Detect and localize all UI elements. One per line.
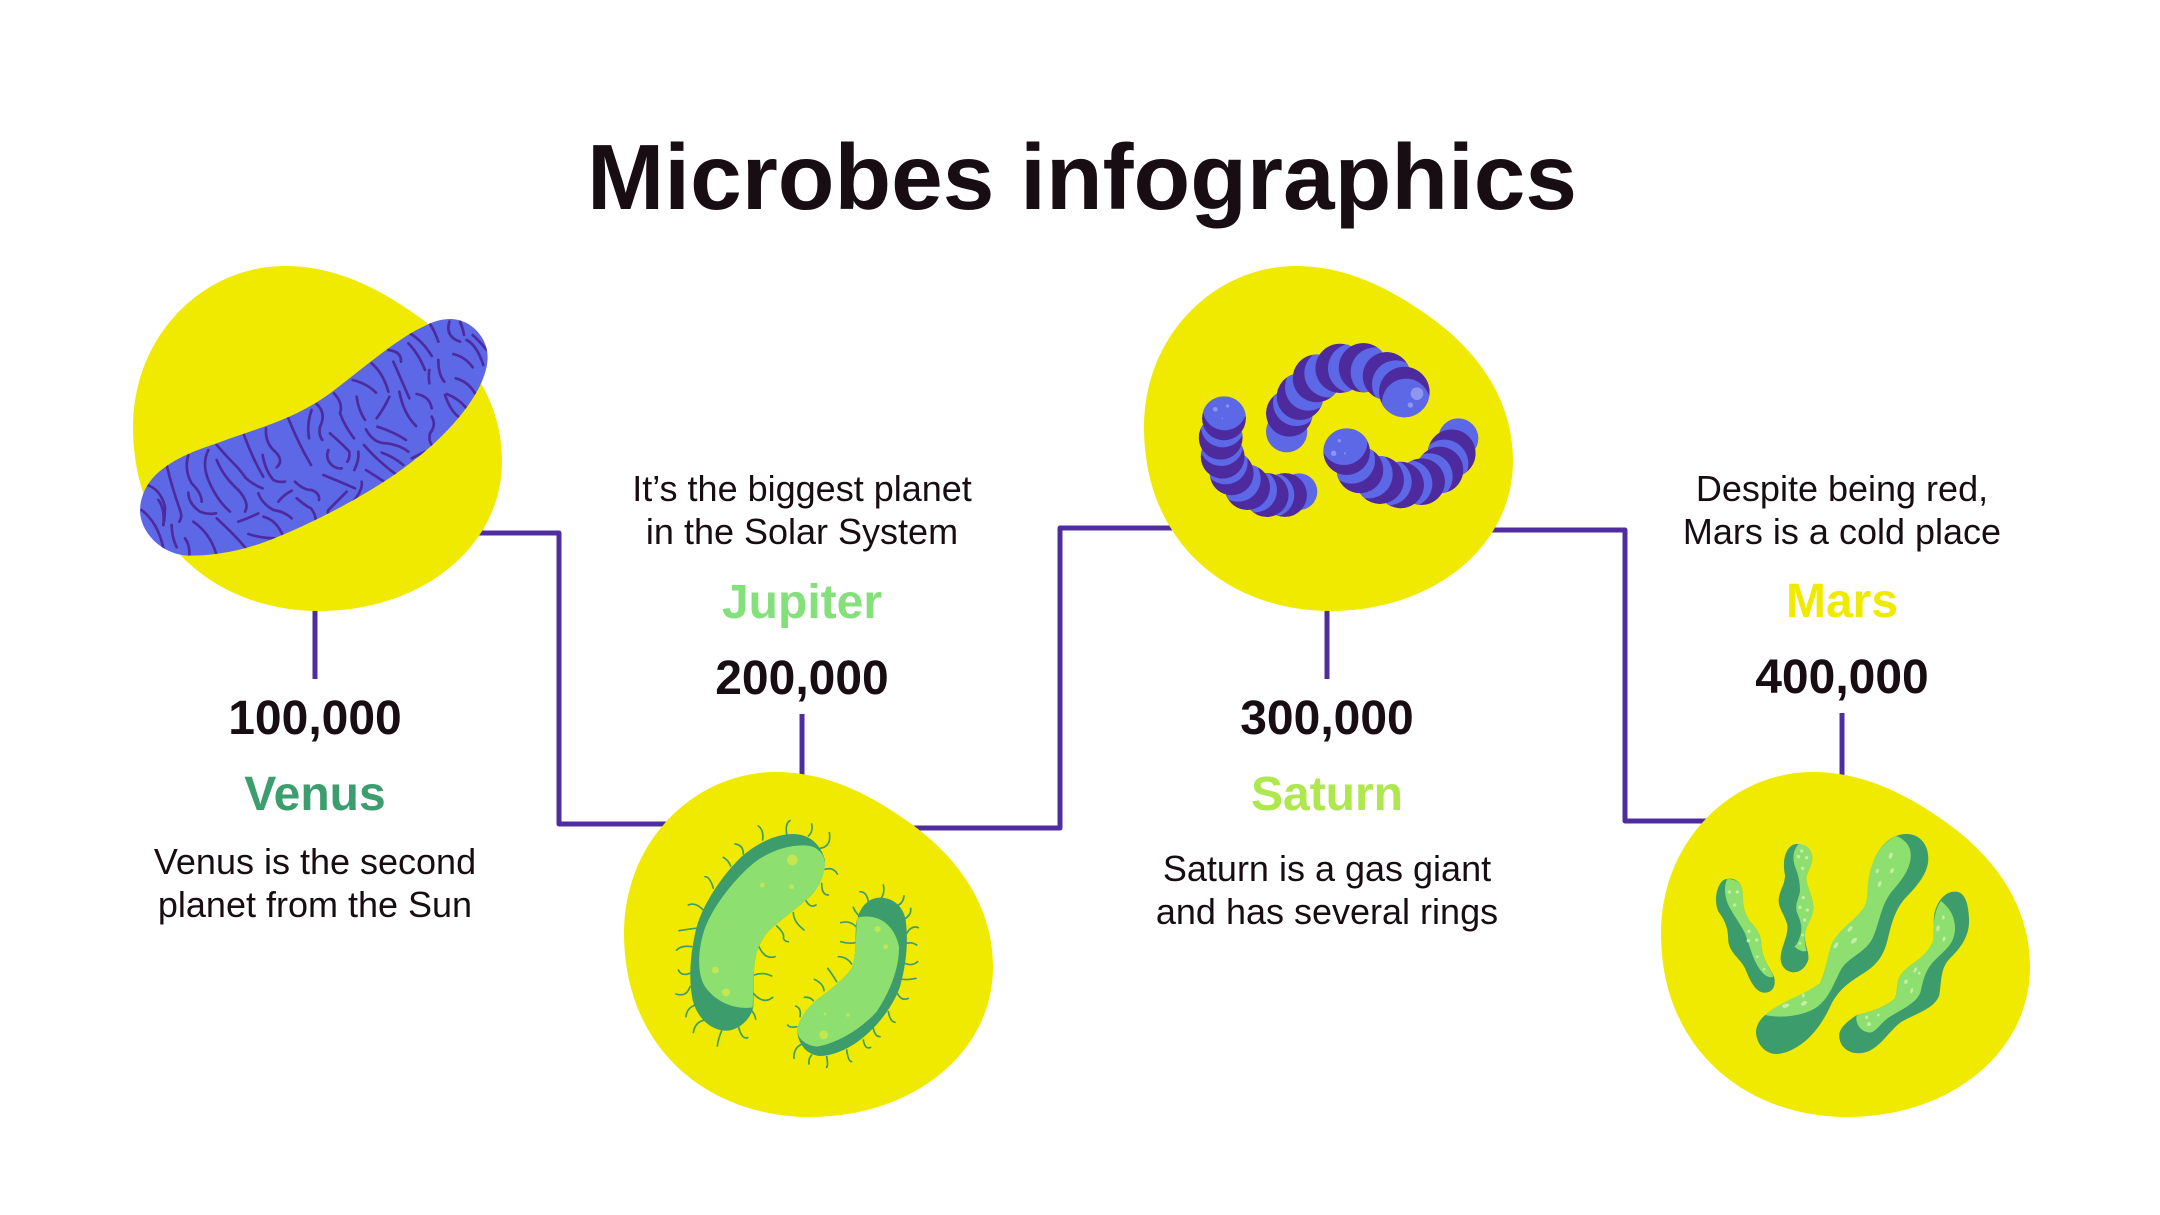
stem: Saturn: [1324, 605, 1330, 679]
connector: Jupiter to Saturn: [900, 528, 1185, 828]
icon: striped purple bacterium: [140, 319, 488, 556]
blob: Venus: [133, 266, 502, 611]
stem: Jupiter: [800, 714, 804, 785]
value: Jupiter: 200,000: [715, 652, 889, 705]
description: Mars: Mars is a cold place: [1683, 511, 2001, 552]
description: Mars: Despite being red,: [1696, 468, 1988, 509]
name: Jupiter: Jupiter: [722, 576, 882, 629]
panel: Jupiter: [624, 468, 993, 1117]
name: Venus: Venus: [244, 768, 386, 821]
panel: Mars: [1661, 468, 2030, 1117]
panel: Venus: [133, 266, 502, 925]
stem: Venus: [312, 605, 318, 679]
connector: Venus to Jupiter: [470, 533, 680, 824]
blob: Mars: [1661, 772, 2030, 1117]
connector: Saturn to Mars: [1485, 530, 1720, 821]
description: Saturn: Saturn is a gas giant: [1163, 848, 1491, 889]
value: Mars: 400,000: [1755, 651, 1929, 704]
value: Venus: 100,000: [228, 692, 402, 745]
description: Jupiter: It’s the biggest planet: [632, 468, 972, 509]
icon: green hairy bacteria: [676, 821, 918, 1067]
name: Saturn: Saturn: [1251, 768, 1403, 821]
description: Venus: planet from the Sun: [158, 884, 472, 925]
icon: wavy green bacteria: [1716, 834, 1969, 1054]
description: Venus: Venus is the second: [154, 841, 476, 882]
blob: Saturn: [1144, 266, 1513, 611]
stem: Mars: [1840, 713, 1844, 785]
icon: segmented purple worms: [1199, 343, 1478, 517]
panel: Saturn: [1144, 266, 1513, 932]
description: Jupiter: in the Solar System: [646, 511, 958, 552]
value: Saturn: 300,000: [1240, 692, 1414, 745]
title: Microbes infographics: [587, 125, 1577, 229]
blob: Jupiter: [624, 772, 993, 1117]
description: Saturn: and has several rings: [1156, 891, 1498, 932]
name: Mars: Mars: [1786, 575, 1898, 628]
